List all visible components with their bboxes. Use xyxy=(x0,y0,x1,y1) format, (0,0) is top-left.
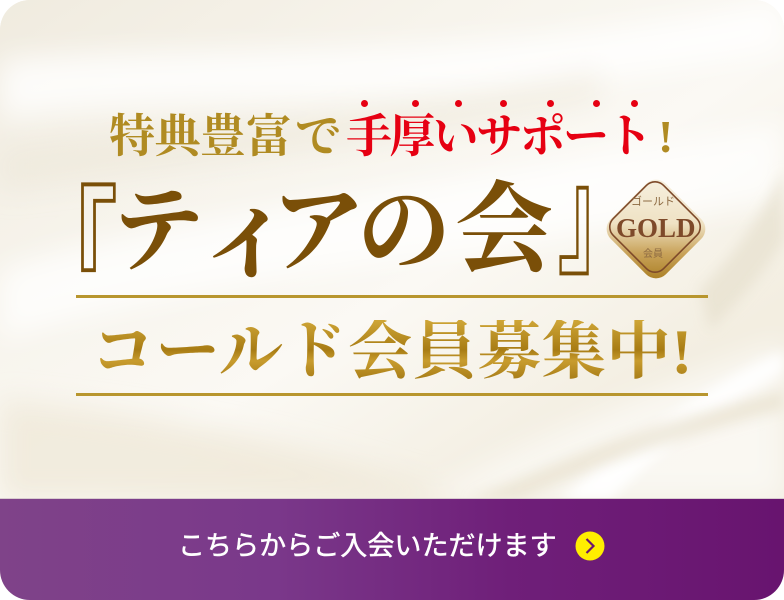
footer band xyxy=(0,498,784,600)
badge label top: ゴールド xyxy=(631,196,675,208)
subtitle: コールド会員募集中!: コールド会員募集中! xyxy=(91,316,693,387)
call to action text: こちらからご入会いただけます xyxy=(178,531,557,561)
exclamation mark: ! xyxy=(658,111,673,162)
emphasis dots xyxy=(361,100,638,107)
heading: 特典豊富で手厚いサポート! xyxy=(109,111,673,162)
title: 『ティアの会』: 会 xyxy=(455,177,553,285)
title: 『ティアの会』: 『 xyxy=(20,179,119,332)
badge word GOLD: GOLD xyxy=(616,213,696,243)
divider bottom xyxy=(76,393,708,396)
title: 『ティアの会』: の xyxy=(357,180,451,284)
title: 『ティアの会』 xyxy=(20,141,641,332)
text: 』 xyxy=(557,141,641,294)
gold heading text: 特典豊富で xyxy=(109,111,340,162)
divider top xyxy=(76,295,708,298)
badge: GOLD xyxy=(606,180,706,278)
red emphasized text: 手厚いサポート xyxy=(346,111,650,162)
icon: yellow arrow button xyxy=(576,532,604,560)
title: 『ティアの会』: ィ xyxy=(194,177,299,294)
title: 『ティアの会』: ア xyxy=(271,180,365,284)
title: 『ティアの会』: テ xyxy=(111,180,205,284)
badge label bottom: 会員 xyxy=(643,249,663,260)
